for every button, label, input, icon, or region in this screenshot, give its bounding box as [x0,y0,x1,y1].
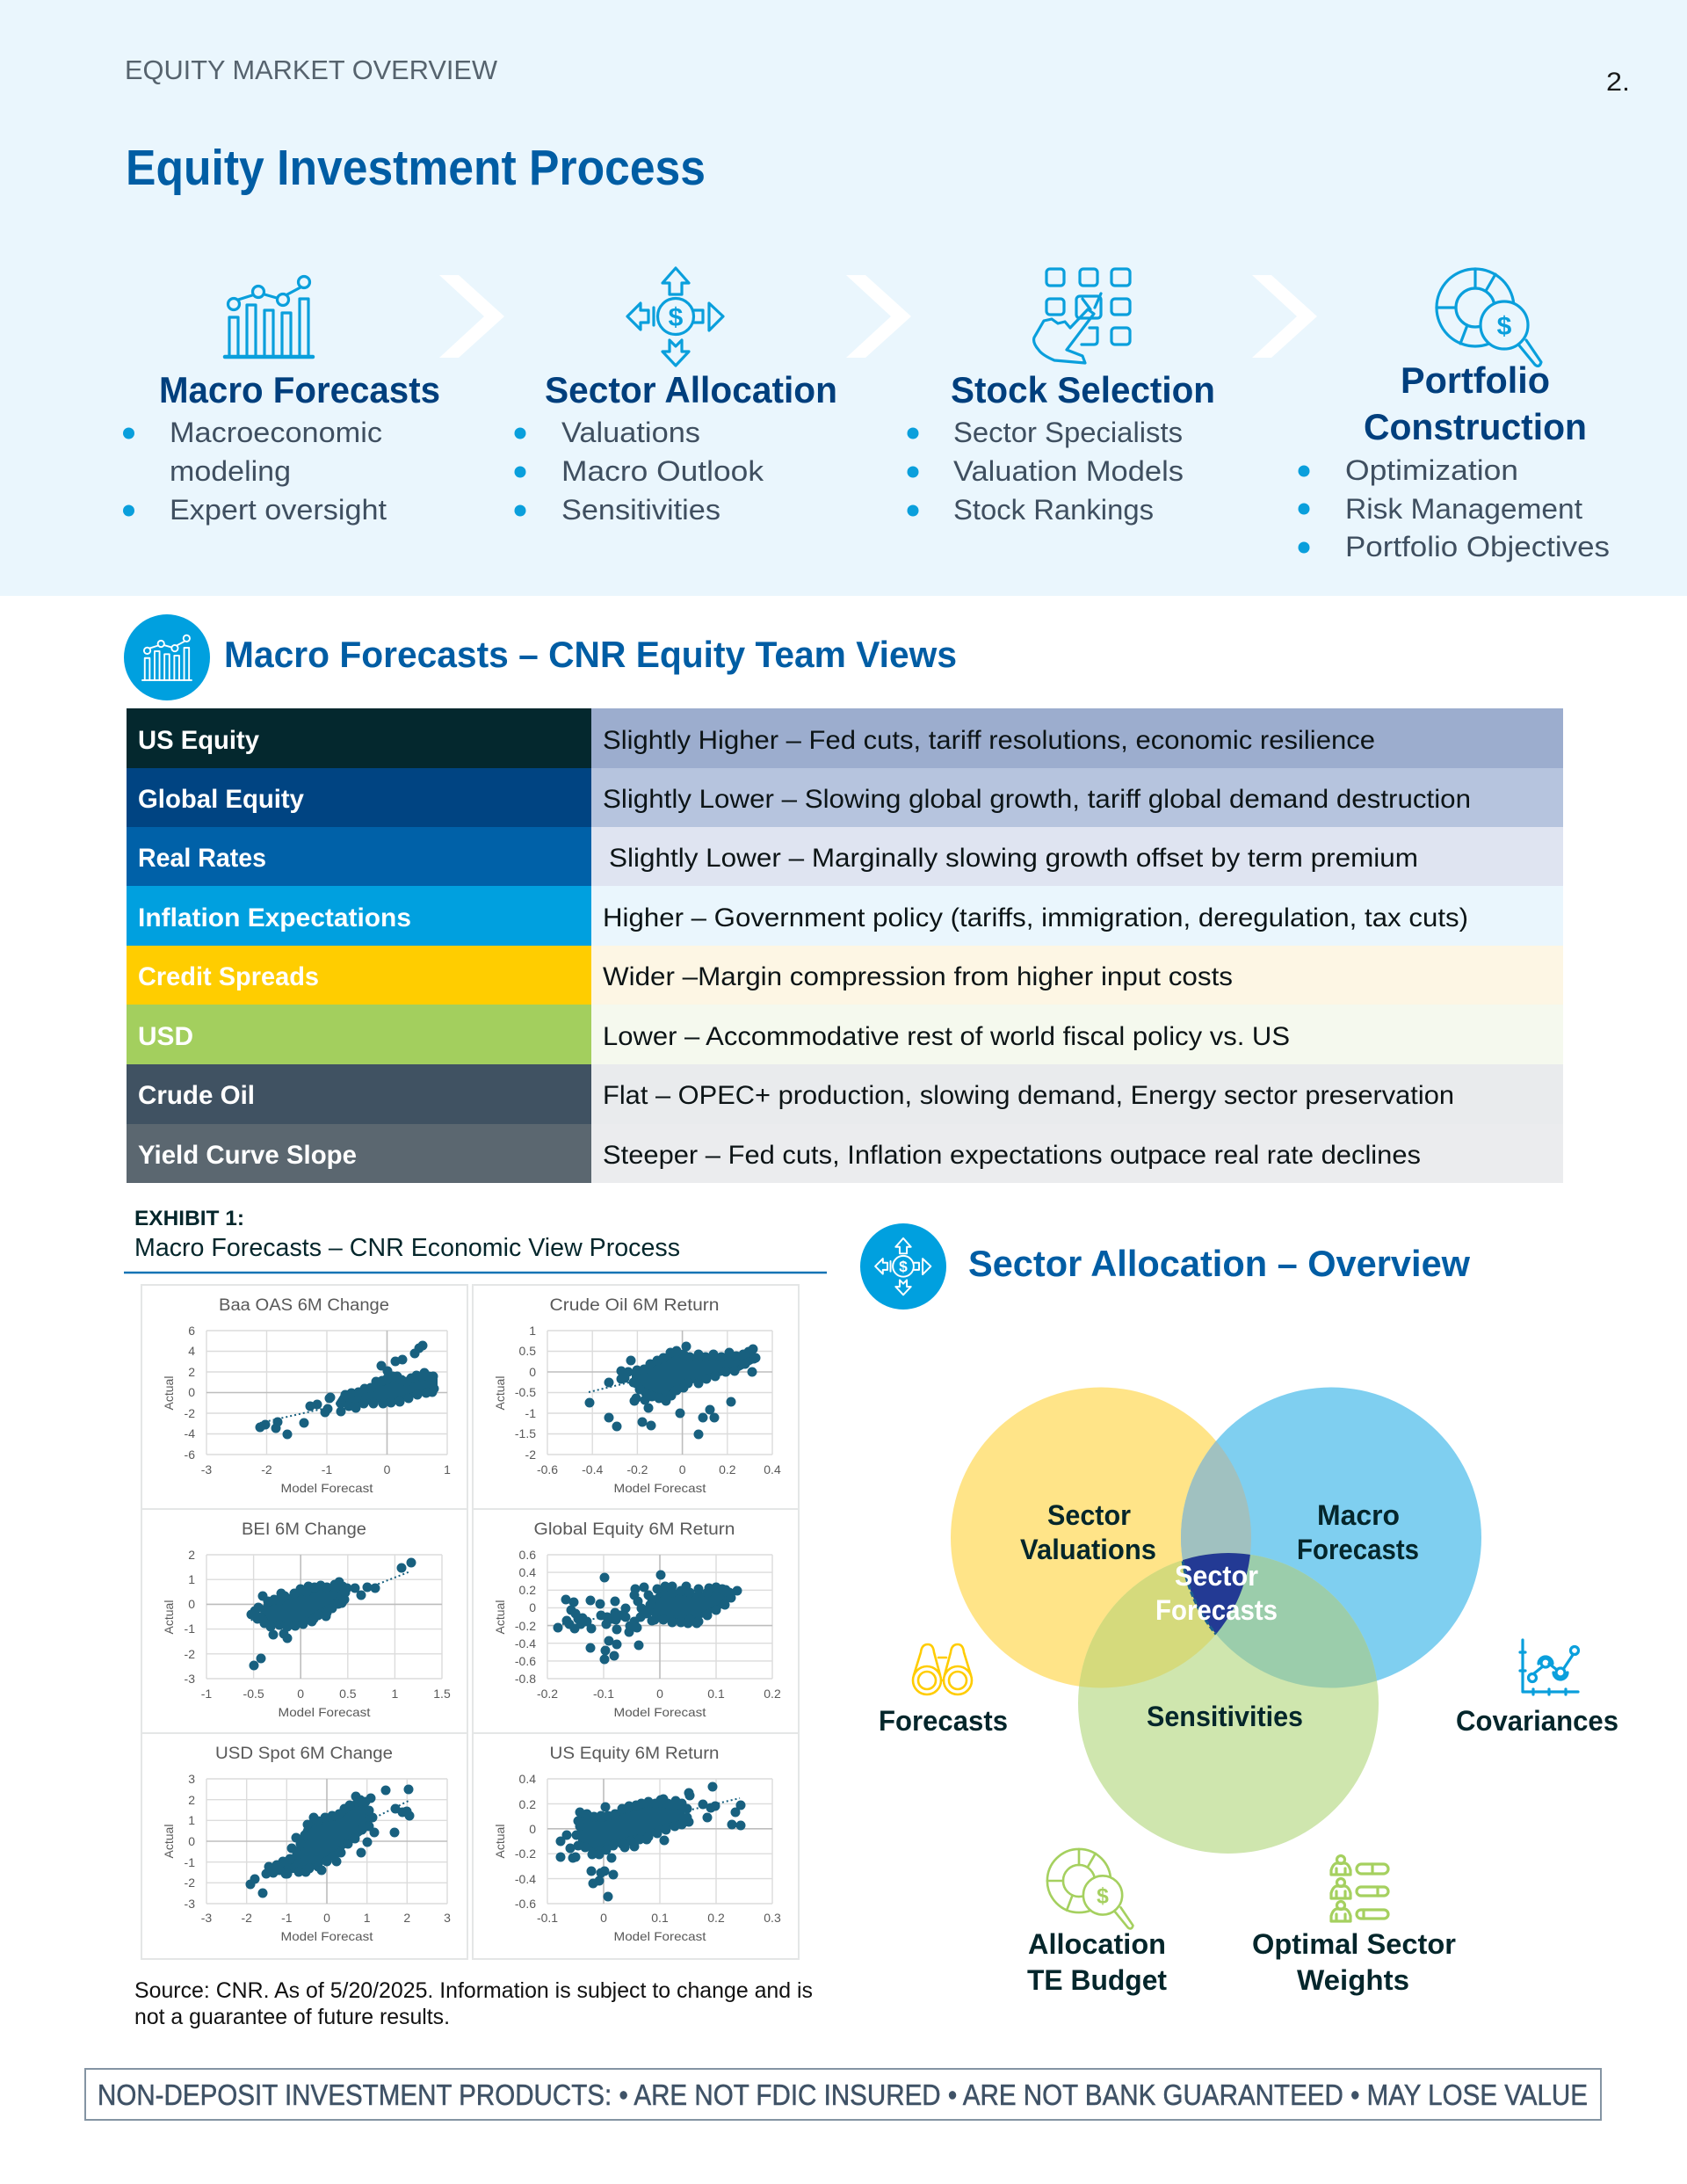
chart panel: usd spot: USD Spot 6M Change [215,1745,393,1763]
chart panel: us equity: 0.2 [707,1911,725,1925]
icon: allocation pie with magnifier [1047,1849,1133,1928]
bullet list [123,417,387,526]
row: inflation expectations: Inflation Expectations [138,903,411,932]
chart panel: usd spot: 3 [444,1911,451,1925]
chart panel: baa oas: -2 [261,1462,272,1477]
chart panel: baa oas: -3 [201,1462,212,1477]
chart panel: global equity [473,1509,799,1733]
row: credit spreads [127,946,1563,1005]
chart panel: usd spot: -1 [281,1911,293,1925]
chart panel: global equity: -0.8 [515,1672,536,1686]
bullet list: Valuations [561,417,700,448]
row: usd [127,1005,1563,1064]
chart panel: crude oil: 1 [529,1324,536,1338]
chart panel: global equity: -0.6 [515,1654,536,1668]
section label: equity market overview: EQUITY MARKET OVERVIEW [125,54,498,85]
chart panel: us equity: Model Forecast [613,1929,706,1943]
chart panel: usd spot: 1 [364,1911,371,1925]
chart panel: us equity: 0.3 [764,1911,781,1925]
row: inflation expectations [127,886,1563,946]
chart panel: crude oil: 0 [529,1365,536,1379]
source note: Source: CNR. As of 5/20/2025. Information is subject to change and is [134,1978,813,2003]
icon: sector allocation badge: $ [899,1258,908,1275]
row: real rates: Real Rates [138,844,266,873]
chart panel: usd spot: -3 [201,1911,212,1925]
overlap: macro and sensitivities [1184,1553,1377,1687]
icon: pie chart with magnifier [1437,269,1541,366]
chart panel: baa oas: 0 [384,1462,391,1477]
heading: portfolio construction: Portfolio [1401,359,1550,401]
overlap: sector forecasts core [1181,1553,1250,1635]
chart panel: bei: -0.5 [243,1687,264,1701]
chart panel: baa oas: -6 [185,1448,195,1462]
circle: macro forecasts [1181,1387,1481,1687]
exhibit heading: EXHIBIT 1: [134,1207,244,1230]
chart panel: usd spot: 2 [188,1793,195,1807]
chart panel: bei: -2 [185,1647,195,1661]
page number: 2. [1606,68,1630,97]
chart panel: global equity: -0.2 [537,1687,558,1701]
chart panel: crude oil: 0 [679,1462,686,1477]
row: credit spreads: Credit Spreads [138,962,319,991]
chart panel: global equity: Actual [493,1600,507,1634]
row: usd: Lower – Accommodative rest of world fiscal policy vs. US [603,1022,1290,1051]
bullet list: Valuation Models [953,455,1184,487]
chart panel: usd spot: 2 [403,1911,410,1925]
heading: portfolio construction [1364,359,1587,447]
chart panel: global equity: 0.4 [519,1565,536,1579]
label: optimal sector weights [1252,1928,1456,1996]
bullet list: modeling [170,455,291,487]
bullet list: Sensitivities [561,494,720,526]
label: covariances: Covariances [1456,1705,1618,1737]
icon: allocation pie with magnifier: $ [1097,1884,1109,1908]
chart panel: usd spot: -3 [185,1897,195,1911]
chart panel: crude oil: -0.4 [582,1462,603,1477]
overlap: valuations and macro [1181,1441,1251,1560]
row: crude oil: Crude Oil [138,1081,255,1110]
bullet list [515,417,764,526]
chart panel: global equity: 0.1 [707,1687,725,1701]
chart panel: global equity: -0.4 [515,1636,536,1651]
chart panel: us equity: Actual [493,1825,507,1858]
row: yield curve slope: Steeper – Fed cuts, Inflation expectations outpace real rate declines [603,1141,1421,1170]
footer disclaimer [85,2069,1601,2120]
chart panel: baa oas [141,1285,467,1509]
label: macro forecasts: Forecasts [1297,1534,1419,1565]
chart panel: us equity: -0.6 [515,1897,536,1911]
icon: dollar with four arrows: $ [669,303,684,332]
chart panel: baa oas: Baa OAS 6M Change [219,1296,389,1315]
arrow: chevron 3 [1252,275,1317,358]
row: yield curve slope: Yield Curve Slope [138,1141,357,1170]
chart panel: usd spot: Actual [162,1825,176,1858]
chart panel: bei: -3 [185,1672,195,1686]
chart panel: bei: 1 [188,1572,195,1586]
icon: dollar with four arrows [627,268,723,366]
chart panel: baa oas: -4 [185,1426,195,1440]
row: real rates [127,827,1563,886]
table: team views [127,708,1563,1183]
chart panel: us equity: US Equity 6M Return [550,1745,719,1763]
chart panel: us equity: -0.2 [515,1847,536,1861]
chart panel: baa oas: Actual [162,1376,176,1410]
chart panel: usd spot: -1 [185,1855,195,1869]
row: inflation expectations: Higher – Government policy (tariffs, immigration, deregulation, tax cuts) [603,903,1468,932]
row: us equity [127,708,1563,768]
chart panel: us equity: -0.4 [515,1872,536,1886]
chart panel: global equity: 0.6 [519,1548,536,1562]
chart panel: usd spot: 1 [188,1813,195,1827]
chart panel: baa oas: 4 [188,1344,195,1358]
chart panel: bei [141,1509,467,1733]
bullet list: Expert oversight [170,494,387,526]
icon: macro forecasts badge [124,614,210,700]
chart panel: global equity: -0.2 [515,1619,536,1633]
label: allocation te budget: TE Budget [1027,1964,1167,1996]
row: us equity: US Equity [138,726,259,755]
arrow: chevron 2 [846,275,911,358]
title: Equity Investment Process [126,140,706,196]
chart panel: baa oas: Model Forecast [281,1481,373,1495]
chart panel: us equity: 0 [529,1822,536,1836]
row: global equity: Global Equity [138,785,304,814]
chart panel: crude oil: -1 [525,1406,536,1420]
chart panel: bei: 0 [188,1597,195,1611]
label: sector forecasts: Sector [1175,1560,1258,1592]
row: global equity: Slightly Lower – Slowing global growth, tariff global demand destruction [603,785,1471,814]
chart panel: bei: Model Forecast [278,1705,371,1719]
bullet list: Risk Management [1345,493,1582,525]
chart panel: bei: 0.5 [339,1687,357,1701]
chart panel: us equity: 0.4 [519,1772,536,1786]
chart panel: global equity: -0.1 [593,1687,614,1701]
heading: macro forecasts team views: Macro Forecasts – CNR Equity Team Views [224,634,957,675]
label: sector valuations: Valuations [1020,1534,1156,1565]
chart panel: crude oil: 0.2 [719,1462,736,1477]
icon: pie chart with magnifier: $ [1497,312,1512,341]
heading: macro forecasts: Macro Forecasts [159,369,440,410]
row: crude oil [127,1064,1563,1124]
chart panel: global equity: 0 [656,1687,663,1701]
bullet list: Macro Outlook [561,455,764,487]
chart panel: us equity: 0.1 [651,1911,669,1925]
chart panel: usd spot [141,1733,467,1959]
icon: optimal weights list [1331,1856,1388,1921]
chart panel: crude oil: -0.6 [537,1462,558,1477]
chart panel: baa oas: 6 [188,1324,195,1338]
row: crude oil: Flat – OPEC+ production, slowing demand, Energy sector preservation [603,1081,1454,1110]
chart panel: crude oil: Actual [493,1376,507,1410]
chart panel: crude oil: 0.5 [519,1344,536,1358]
label: macro forecasts [1297,1499,1419,1565]
bullet list: Sector Specialists [953,417,1183,448]
circle: sensitivities [1078,1553,1379,1854]
exhibit heading: Macro Forecasts – CNR Economic View Process [134,1234,680,1262]
chart panel: us equity: -0.1 [537,1911,558,1925]
chart panel: bei: Actual [162,1600,176,1634]
icon: bar chart with trend line [225,276,313,357]
chart panel: usd spot: Model Forecast [281,1929,373,1943]
chart panel: bei: BEI 6M Change [242,1520,366,1539]
chart panel: baa oas: 2 [188,1365,195,1379]
heading: stock selection: Stock Selection [951,369,1215,410]
heading: sector allocation: Sector Allocation [545,369,837,410]
chart panel: global equity: Model Forecast [613,1705,706,1719]
label: sector valuations [1020,1499,1156,1565]
label: optimal sector weights: Optimal Sector [1252,1928,1456,1960]
row: yield curve slope [127,1124,1563,1183]
header band [0,0,1687,596]
panel: portfolio construction step [1299,269,1610,562]
chart panel: us equity: 0 [600,1911,607,1925]
icon: binoculars [913,1644,972,1694]
chart panel: crude oil: -1.5 [515,1426,536,1440]
chart panel: bei: 2 [188,1548,195,1562]
row: global equity [127,768,1563,827]
label: sector forecasts: Forecasts [1155,1594,1278,1626]
chart panel: crude oil [473,1285,799,1509]
chart panel: baa oas: -2 [185,1406,195,1420]
label: sector valuations: Sector [1047,1499,1131,1531]
overlap: valuations and sensitivities [1079,1553,1250,1687]
chart panel: usd spot: 0 [188,1834,195,1848]
chart panel: usd spot: 3 [188,1772,195,1786]
bullet list [907,417,1184,526]
label: allocation te budget [1027,1928,1167,1996]
chart panel: bei: 1.5 [433,1687,451,1701]
panel: sector allocation step [515,268,837,526]
chart panel: us equity [473,1733,799,1959]
chart panel: global equity: 0.2 [764,1687,781,1701]
circle: sector valuations [951,1387,1251,1687]
panel: macro forecasts step [123,276,440,526]
chart panel: crude oil: -0.2 [626,1462,648,1477]
chart panel: global equity: Global Equity 6M Return [534,1520,735,1539]
chart panel: usd spot: 0 [323,1911,330,1925]
row: us equity: Slightly Higher – Fed cuts, tariff resolutions, economic resilience [603,726,1375,755]
arrow: chevron 1 [439,275,504,358]
chart panel: crude oil: Model Forecast [613,1481,706,1495]
chart panel: global equity: 0.2 [519,1583,536,1597]
row: usd: USD [138,1022,193,1051]
chart panel: usd spot: -2 [185,1876,195,1890]
chart panel: us equity: 0.2 [519,1797,536,1811]
bullet list: Macroeconomic [170,417,382,448]
chart panel: baa oas: 1 [444,1462,451,1477]
chart panel: bei: 0 [297,1687,304,1701]
icon: sector allocation badge [860,1223,946,1310]
icon: hand selecting from grid [1034,269,1130,363]
row: credit spreads: Wider –Margin compression from higher input costs [603,962,1233,991]
chart panel: bei: -1 [185,1622,195,1636]
chart panel: bei: -1 [201,1687,212,1701]
label: sensitivities: Sensitivities [1147,1701,1303,1732]
chart panel: global equity: 0 [529,1600,536,1614]
source note: not a guarantee of future results. [134,2005,450,2029]
venn diagram [951,1387,1481,1854]
chart panel: crude oil: Crude Oil 6M Return [550,1296,719,1315]
chart panel: crude oil: 0.4 [764,1462,781,1477]
icon: covariance chart [1520,1640,1578,1694]
chart panel: usd spot: -2 [241,1911,252,1925]
label: sector forecasts [1155,1560,1278,1626]
chart panel: crude oil: -2 [525,1448,536,1462]
panel: stock selection step [907,269,1215,526]
heading: sector allocation overview: Sector Allocation – Overview [968,1243,1470,1284]
label: forecasts: Forecasts [879,1705,1008,1737]
bullet list: Optimization [1345,454,1518,486]
label: macro forecasts: Macro [1317,1499,1400,1531]
bullet list: Portfolio Objectives [1345,531,1610,562]
label: optimal sector weights: Weights [1297,1964,1409,1996]
bullet list: Stock Rankings [953,494,1154,526]
exhibit heading [124,1207,827,1273]
source note [134,1978,813,2029]
label: allocation te budget: Allocation [1028,1928,1166,1960]
chart panel: baa oas: -1 [322,1462,332,1477]
bullet list [1299,454,1610,562]
heading: portfolio construction: Construction [1364,406,1587,447]
chart panel: baa oas: 0 [188,1385,195,1399]
row: real rates: Slightly Lower – Marginally slowing growth offset by term premium [609,844,1418,873]
chart panel: crude oil: -0.5 [515,1385,536,1399]
chart panel: bei: 1 [392,1687,399,1701]
